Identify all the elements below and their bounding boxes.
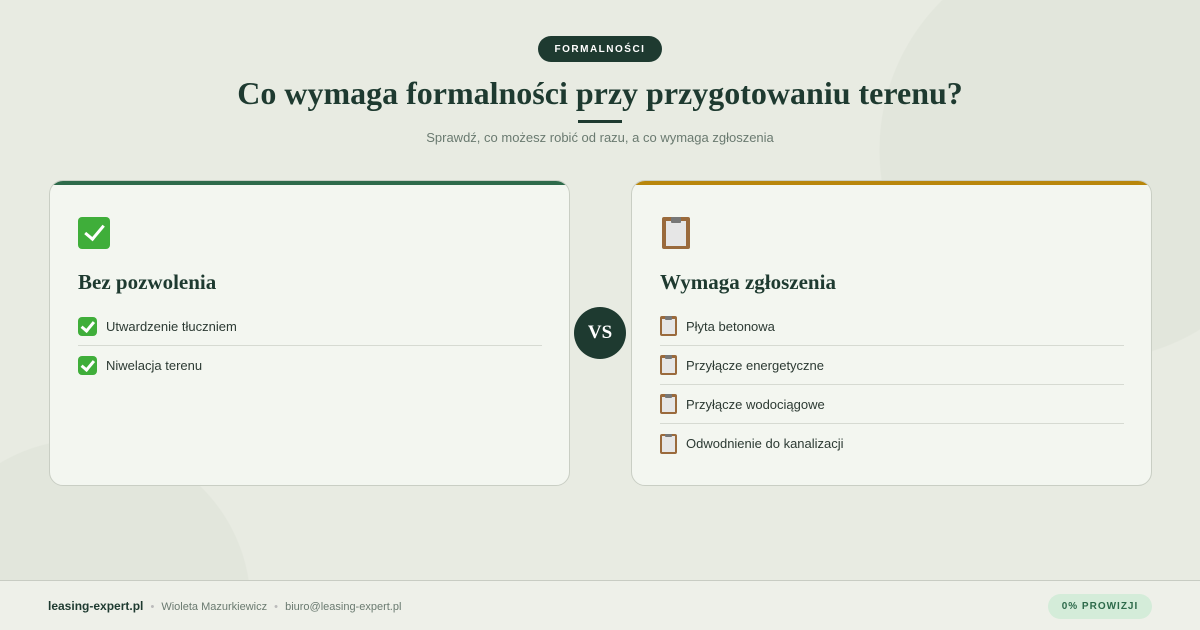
heading: Wymaga zgłoszenia	[660, 270, 836, 294]
item: Płyta betonowa	[686, 318, 775, 334]
badge: 0% prowizji: 0% PROWIZJI	[1062, 601, 1138, 612]
icon: check	[78, 217, 110, 249]
footer text: leasing-expert.pl • Wioleta Mazurkiewicz • biuro@leasing-expert.pl	[48, 599, 401, 613]
item	[660, 385, 1124, 424]
item	[660, 346, 1124, 385]
vs circle	[574, 307, 626, 359]
item	[660, 307, 1124, 346]
heading: Bez pozwolenia	[78, 270, 216, 294]
footer	[0, 580, 1200, 630]
subtitle: Sprawdź, co możesz robić od razu, a co wymaga zgłoszenia	[426, 130, 774, 145]
item	[78, 307, 542, 346]
vs circle: VS	[588, 322, 612, 343]
item: Odwodnienie do kanalizacji	[686, 436, 844, 451]
item	[78, 356, 202, 375]
icon: clipboard	[662, 217, 690, 249]
title: Co wymaga formalności przy przygotowaniu terenu?	[237, 75, 963, 111]
item: Utwardzenie tłuczniem	[106, 318, 237, 334]
badge: formalności: FORMALNOŚCI	[555, 44, 645, 55]
item	[660, 434, 844, 454]
panel: wymaga zgłoszenia	[631, 180, 1152, 486]
item: Przyłącze wodociągowe	[686, 396, 825, 412]
item: Przyłącze energetyczne	[686, 358, 824, 372]
badge: 0% prowizji	[1048, 594, 1152, 619]
badge: formalności	[538, 36, 662, 62]
item: Niwelacja terenu	[106, 358, 202, 373]
panel: bez pozwolenia	[49, 180, 570, 486]
